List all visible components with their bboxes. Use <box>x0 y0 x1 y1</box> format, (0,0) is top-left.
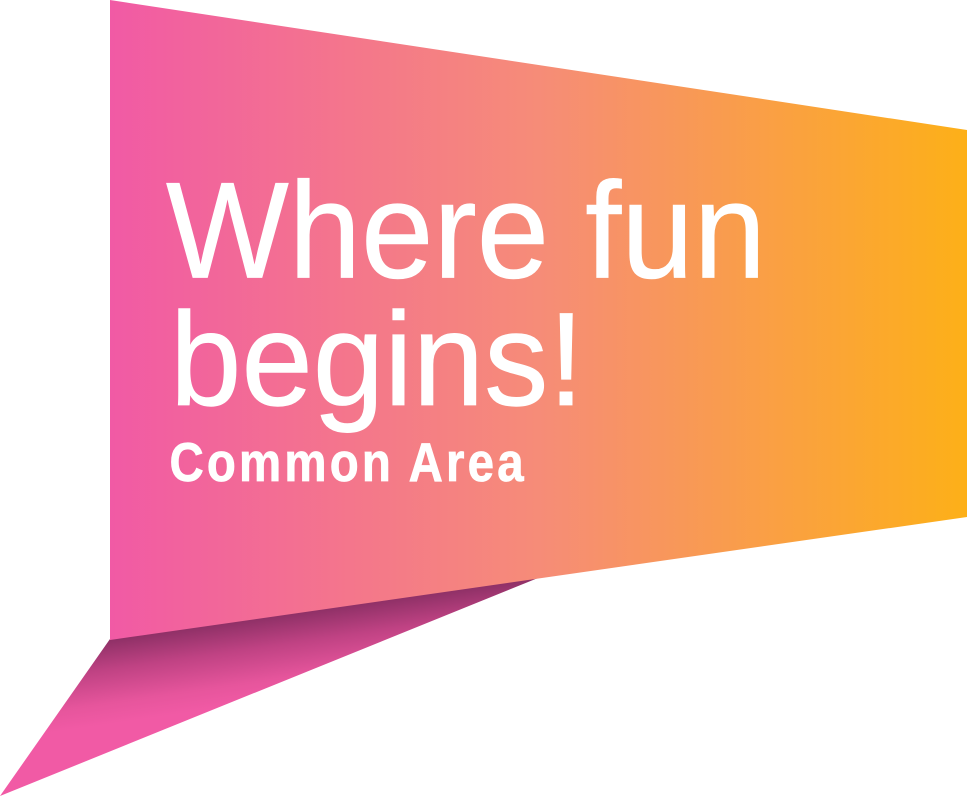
text group <box>166 154 766 493</box>
headline line 1: Where fun <box>166 154 766 308</box>
subheading: Common Area <box>170 432 524 493</box>
headline line 2: begins! <box>170 286 584 434</box>
banner panel <box>110 0 967 640</box>
fold shadow <box>0 578 538 796</box>
